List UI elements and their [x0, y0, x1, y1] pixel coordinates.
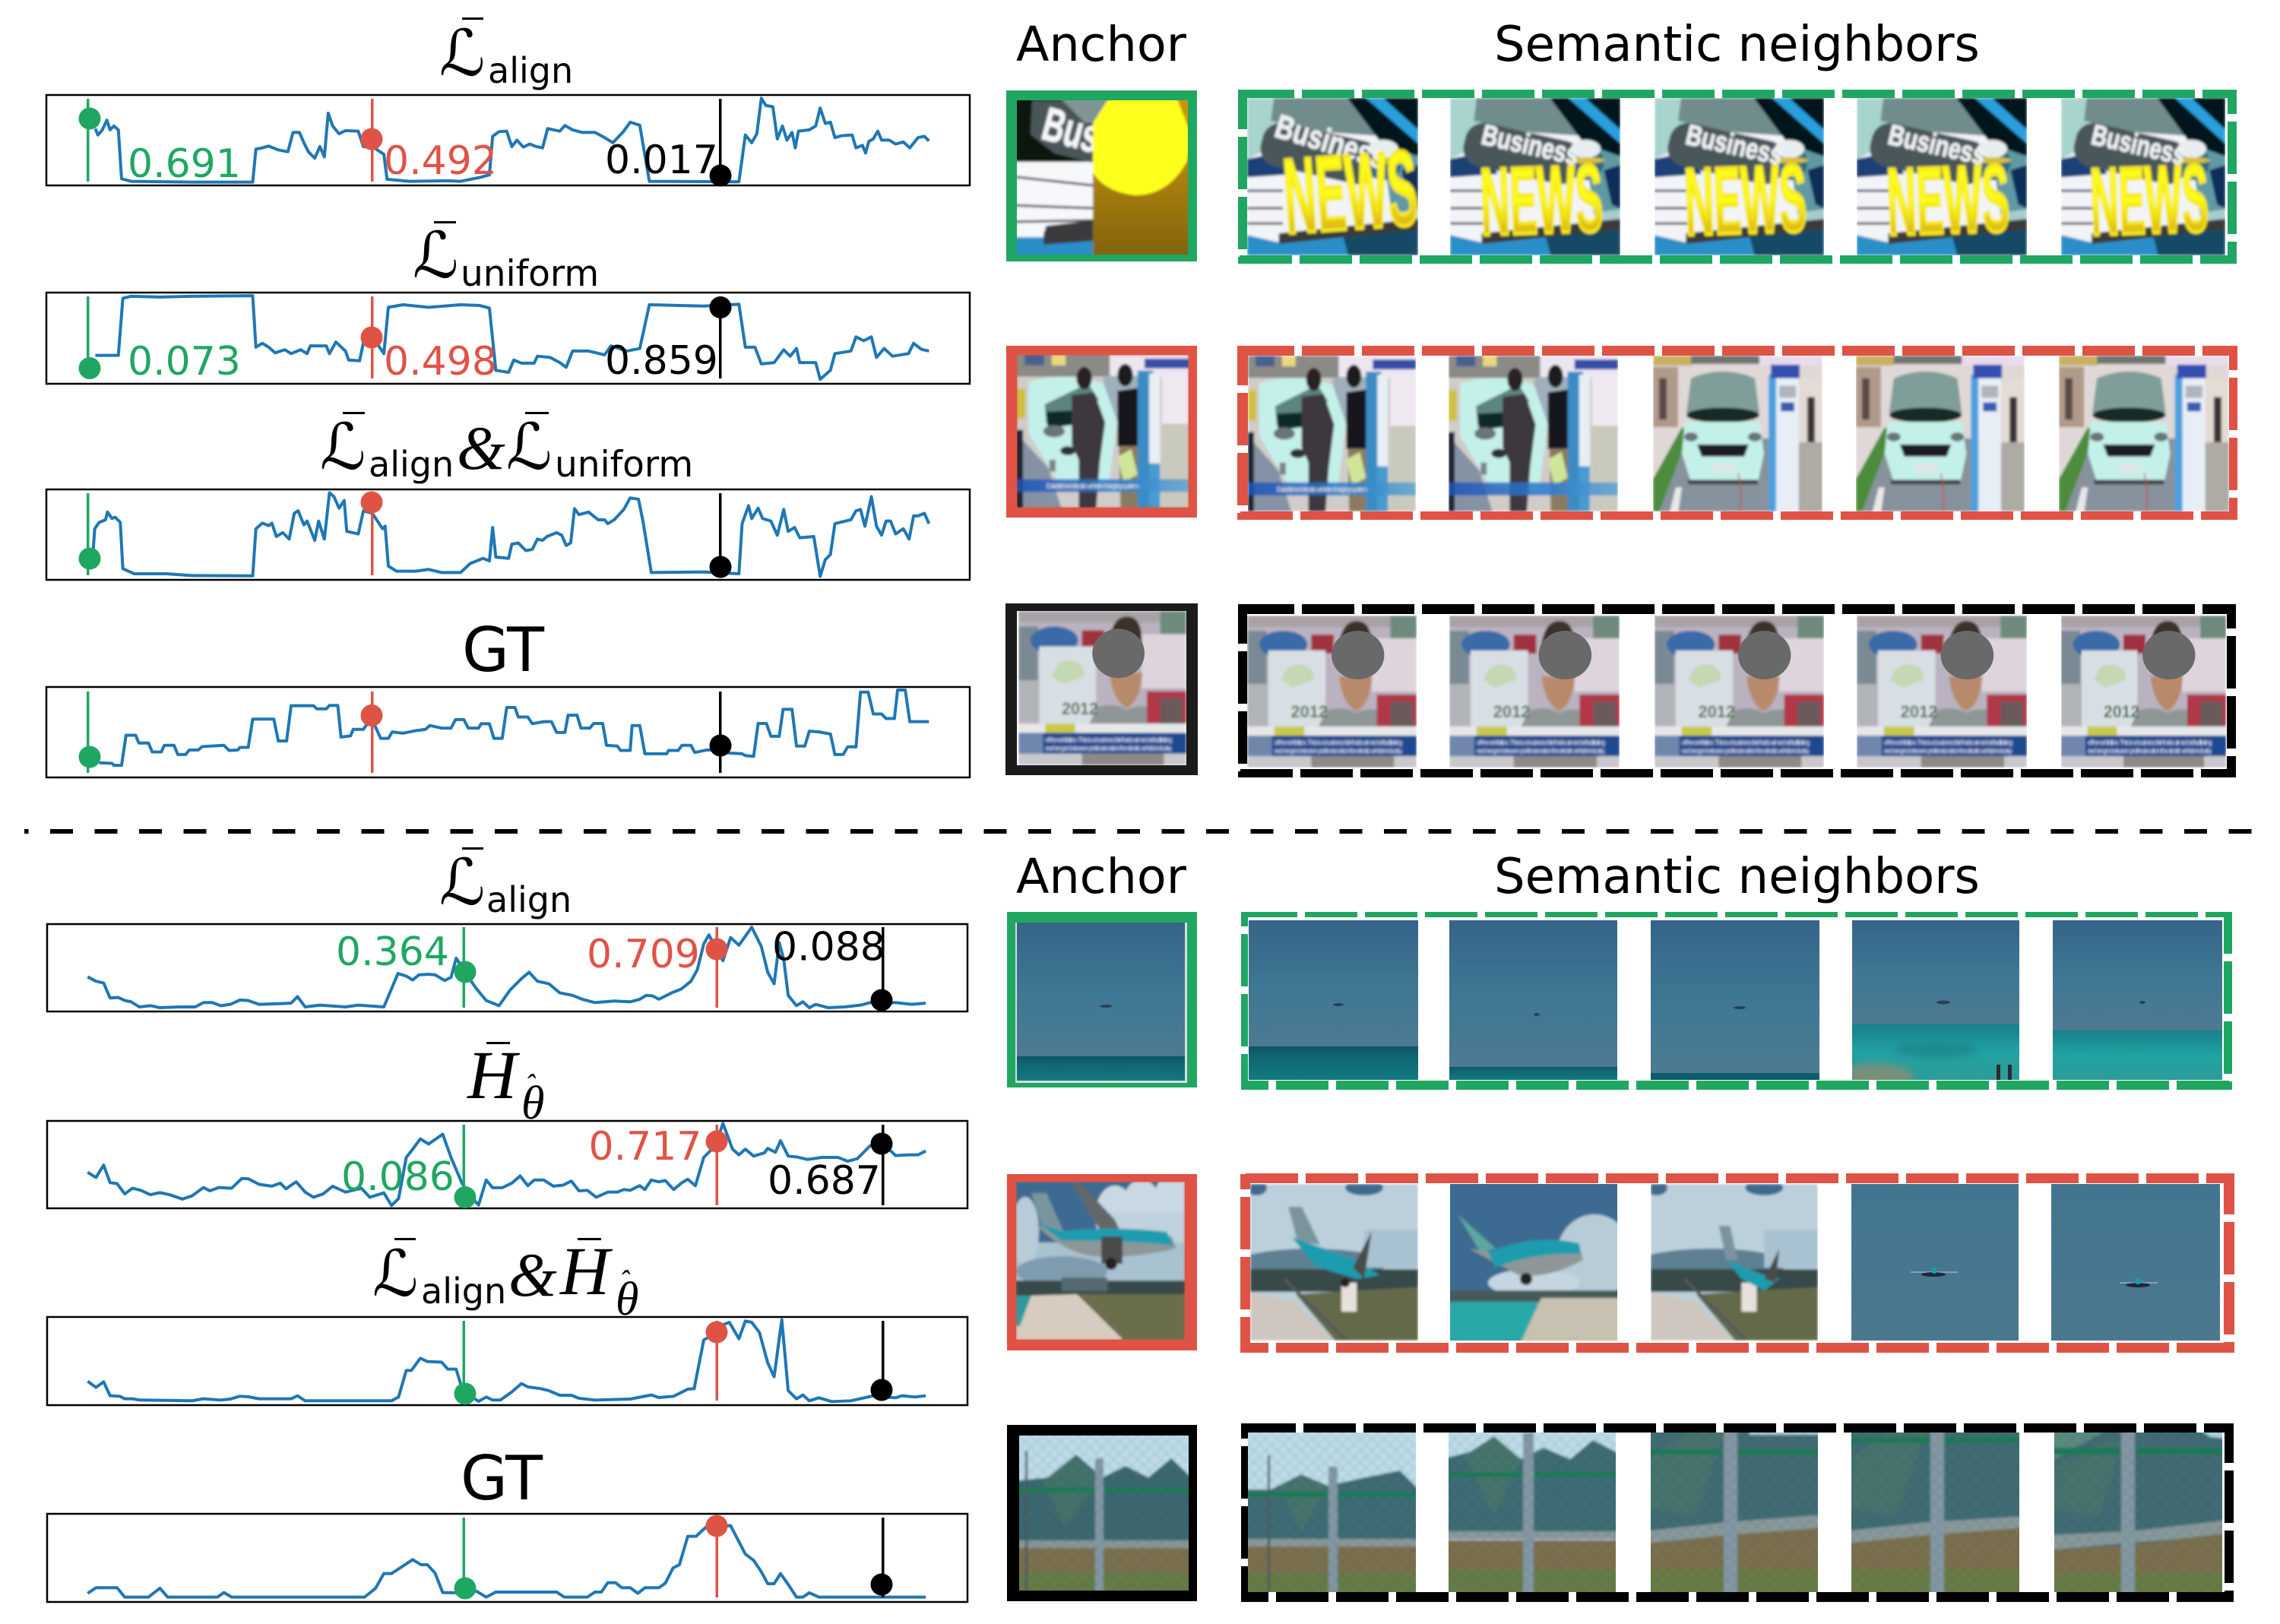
anchor image: car and two men — [1006, 346, 1197, 518]
neighbor images: reporter: exchanges between professionals in the electric vehicle industry. — [1884, 747, 2012, 755]
upper example: charts — [46, 16, 970, 777]
neighbor images: reporter: 2012 — [1493, 702, 1530, 721]
neighbor images: car — [1241, 349, 2236, 518]
neighbor frame: green — [1240, 90, 2237, 264]
title: L align and L uniform: ℒ — [320, 410, 366, 484]
neighbor images: reporter: 2012 — [1901, 702, 1937, 721]
lower example: anchors and neighbors — [1007, 848, 2234, 1602]
neighbor frame: black — [1241, 1423, 2234, 1602]
neighbor images: reporter: exchanges between professionals in the electric vehicle industry. — [1275, 747, 1402, 755]
title: L align and L uniform: & — [457, 413, 505, 483]
title: H theta: θ — [521, 1078, 544, 1129]
neighbor images: reporter: exchanges between professionals in the electric vehicle industry. — [1682, 747, 1810, 755]
neighbor images: reporter: 2012 — [1698, 702, 1735, 721]
title: L align and L uniform: align — [369, 444, 454, 485]
neighbor images: car: Established electric vehicle charging system — [1277, 486, 1367, 493]
anchor image: reporter: 2012 — [1062, 699, 1098, 718]
chart: GT — [47, 1514, 967, 1602]
chart: GT — [46, 687, 970, 777]
anchor image: sea and sky — [1007, 912, 1197, 1087]
neighbor images: news: Business — [2088, 119, 2188, 172]
anchor image: plane over beach — [1007, 1173, 1197, 1350]
title: L align and H theta: align — [421, 1271, 506, 1312]
chart: H theta: 0.086 — [341, 1154, 454, 1200]
neighbor frame: red — [1240, 346, 2237, 520]
neighbor images: reporter: of the exhibition. This is a business fair that is aimed at facilitating — [1477, 739, 1605, 746]
neighbor images: reporter: exchanges between professionals in the electric vehicle industry. — [1477, 747, 1605, 755]
chart: L align — [47, 924, 967, 1011]
neighbor images: news: Business — [1885, 119, 1989, 172]
chart: L align: 0.492 — [384, 138, 497, 184]
neighbor frame: green — [1241, 912, 2232, 1090]
anchor image: reporter: of the exhibition. This is a business fair that is aimed at facilitating — [1045, 736, 1172, 744]
title: L align and H theta: ˆ — [619, 1265, 631, 1297]
chart: H theta — [47, 1121, 967, 1208]
anchor image: fence and mountains — [1007, 1425, 1197, 1601]
title: L align and H theta: & — [508, 1240, 557, 1309]
chart: H theta: 0.717 — [588, 1124, 701, 1170]
neighbor images: reporter: of the exhibition. This is a business fair that is aimed at facilitating — [1682, 739, 1810, 746]
title: L align: ℒ — [439, 16, 485, 90]
title: L align and L uniform: ℒ — [506, 410, 552, 484]
title: L align: ℒ — [439, 845, 485, 920]
chart: L align and L uniform — [46, 489, 970, 580]
anchor image: news close-up: Bus — [1037, 98, 1106, 163]
neighbor images: reporter: exchanges between professionals in the electric vehicle industry. — [2088, 747, 2212, 755]
anchor image: reporter: exchanges between professionals in the electric vehicle industry. — [1045, 745, 1172, 752]
chart: L align: 0.709 — [587, 932, 700, 977]
title: L align and L uniform: uniform — [555, 444, 693, 486]
chart: L uniform: 0.073 — [128, 339, 241, 385]
heading: Semantic neighbors: Semantic neighbors — [1494, 849, 1980, 905]
heading: Semantic neighbors: Semantic neighbors — [1494, 17, 1980, 73]
title: L align — [439, 16, 573, 91]
title: L align and H theta: H — [559, 1234, 613, 1309]
neighbor images: sea and sky — [1249, 920, 2222, 1088]
anchor image: car and two men: Established electric vehicle charging system — [1047, 483, 1139, 489]
divider line — [24, 829, 2253, 834]
neighbor images: reporter: of the exhibition. This is a business fair that is aimed at facilitating — [1884, 739, 2012, 746]
chart: L align — [46, 95, 970, 187]
chart: L align: 0.017 — [605, 138, 718, 183]
title: H theta — [467, 1038, 544, 1129]
neighbor images: reporter — [1240, 609, 2233, 774]
neighbor images: reporter: of the exhibition. This is a business fair that is aimed at facilitating — [2088, 739, 2212, 746]
neighbor images: news: Business — [1683, 119, 1786, 172]
neighbor images: reporter: 2012 — [2104, 702, 2139, 721]
chart: L align and H theta — [47, 1317, 967, 1405]
neighbor images: fence and mountains — [1241, 1426, 2229, 1600]
anchor image: reporter — [1005, 603, 1198, 775]
chart: L align: 0.088 — [772, 924, 885, 970]
title: H theta: ˆ — [525, 1069, 537, 1101]
title: L align: align — [486, 879, 572, 920]
neighbor images: news: Business — [1478, 119, 1582, 172]
neighbor frame: black — [1240, 604, 2236, 777]
title: H theta: H — [467, 1038, 521, 1113]
title: L align and H theta: ℒ — [372, 1236, 418, 1311]
heading: Anchor: Anchor — [1016, 16, 1187, 72]
neighbor images: news: Business — [1271, 108, 1391, 176]
title: L uniform — [413, 218, 599, 295]
upper example: anchors and neighbors — [1005, 16, 2237, 777]
title: L uniform: ℒ — [413, 218, 459, 293]
title: L align: align — [488, 50, 573, 91]
chart: H theta: 0.687 — [768, 1158, 881, 1204]
chart: L align: 0.364 — [336, 929, 449, 975]
title: L align — [439, 845, 572, 920]
chart: L uniform — [46, 293, 970, 385]
neighbor frame: red — [1240, 1174, 2234, 1353]
neighbor images: reporter: of the exhibition. This is a business fair that is aimed at facilitating — [1275, 739, 1402, 746]
anchor image: news close-up — [1006, 90, 1197, 262]
heading: Anchor: Anchor — [1016, 848, 1187, 904]
lower example: charts — [47, 845, 967, 1602]
neighbor images: news — [1240, 91, 2232, 262]
title: L uniform: uniform — [461, 253, 599, 295]
neighbor images: reporter: 2012 — [1290, 702, 1328, 721]
title: L align and H theta — [372, 1234, 638, 1325]
title: GT: GT — [462, 615, 545, 685]
title: L align and L uniform — [320, 410, 693, 486]
title: L align and H theta: θ — [616, 1274, 638, 1325]
title: GT: GT — [461, 1443, 543, 1514]
chart: L uniform: 0.859 — [605, 338, 718, 384]
neighbor images: planes — [1235, 1177, 2220, 1348]
chart: L uniform: 0.498 — [384, 339, 497, 385]
chart: L align: 0.691 — [128, 141, 241, 187]
